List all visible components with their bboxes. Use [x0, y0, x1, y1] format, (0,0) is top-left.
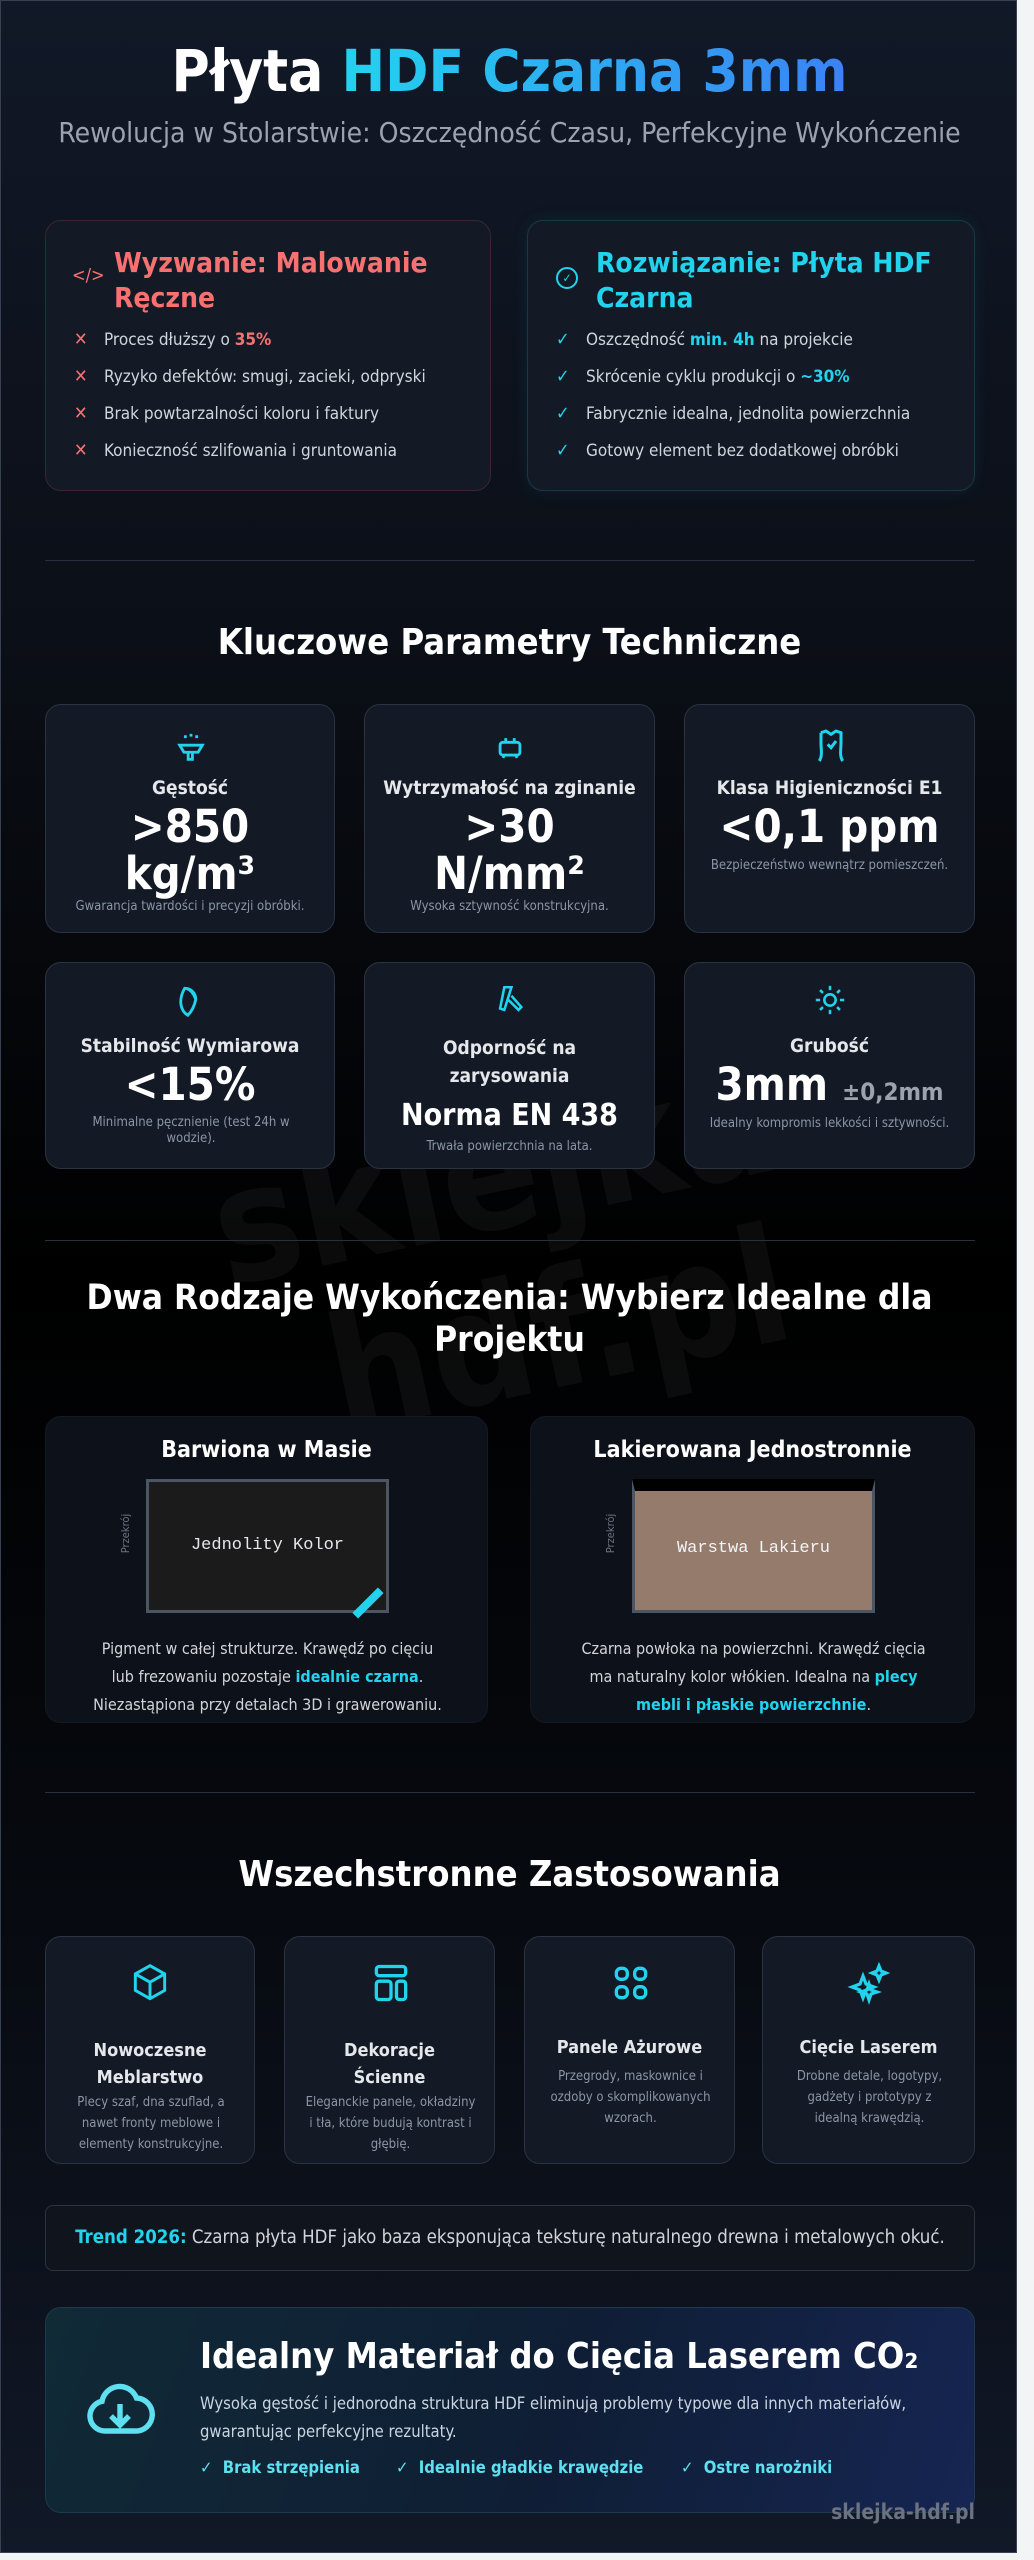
panel: dyed	[45, 1416, 488, 1723]
panel: solution: Skrócenie cyklu produkcji o ~30%	[586, 367, 850, 387]
panel: challenge: Proces dłuższy o 35%	[104, 330, 271, 350]
card: stability: Minimalne pęcznienie (test 24h w wodzie).	[92, 1115, 290, 1146]
card: openwork panels: Panele Ażurowe	[557, 2037, 702, 2058]
card: bending: Wytrzymałość na zginanie	[383, 777, 636, 799]
panel: solution: ✓	[556, 329, 570, 350]
card: laser cutting	[762, 1936, 975, 2164]
icon: pen	[352, 1587, 384, 1619]
card: bending	[364, 704, 655, 933]
watermark: sklejka-	[196, 1009, 851, 1323]
panel: challenge: Ryzyko defektów: smugi, zacieki, odpryski	[104, 367, 426, 387]
card: hygiene: Klasa Higieniczności E1	[717, 777, 942, 799]
panel: laser material: Wysoka gęstość i jednorodna struktura HDF eliminują problemy typowe dla innych materiałów, gwarantując perfekcyjne rezultaty.	[200, 2394, 906, 2441]
panel: dyed: Przekrój	[119, 1514, 132, 1553]
card: hygiene	[684, 704, 975, 933]
card: stability	[45, 962, 335, 1169]
diagram: solid color: Jednolity Kolor	[191, 1536, 344, 1555]
diagram: lacquer layer	[632, 1479, 875, 1613]
icon: leaf	[179, 986, 198, 1017]
card: furniture: Plecy szaf, dna szuflad, a nawet fronty meblowe i elementy konstrukcyjne.	[77, 2095, 225, 2152]
panel: lacquered: Czarna powłoka na powierzchni. Krawędź cięcia ma naturalny kolor włókien. Idealna na plecy mebli i płaskie powierzchnie.	[581, 1639, 926, 1714]
card: scratch: Trwała powierzchnia na lata.	[426, 1139, 593, 1154]
card: furniture: Meblarstwo	[97, 2067, 203, 2088]
card: laser cutting: Drobne detale, logotypy, gadżety i prototypy z idealną krawędzią.	[797, 2069, 942, 2126]
watermark	[196, 1009, 851, 1471]
card: bending: Wysoka sztywność konstrukcyjna.	[410, 899, 609, 914]
icon: bending	[498, 738, 522, 758]
panel: laser material: ✓ Brak strzępienia	[200, 2458, 360, 2477]
panel: dyed: Barwiona w Masie	[161, 1437, 372, 1463]
panel: lacquered: Przekrój	[604, 1514, 617, 1553]
heading: finishes: Dwa Rodzaje Wykończenia: Wybierz Idealne dla Projektu	[87, 1278, 932, 1360]
card: bending: N/mm²	[434, 847, 585, 900]
card: hygiene: Bezpieczeństwo wewnątrz pomieszczeń.	[711, 858, 948, 873]
panel: challenge: ✕	[74, 440, 88, 461]
panel: laser material: ✓ Ostre narożniki	[681, 2458, 832, 2477]
card: density: >850	[131, 800, 249, 853]
card: density: Gwarancja twardości i precyzji obróbki.	[76, 899, 304, 914]
card: wall decor: Dekoracje	[344, 2040, 435, 2061]
title: Płyta HDF Czarna 3mm	[172, 37, 847, 105]
panel: lacquered: Lakierowana Jednostronnie	[593, 1437, 912, 1463]
panel: solution	[527, 220, 975, 491]
card: thickness: 3mm ±0,2mm	[716, 1058, 943, 1111]
heading: challenge: Ręczne	[114, 281, 215, 314]
card: furniture	[45, 1936, 255, 2164]
card: laser cutting: Cięcie Laserem	[800, 2037, 937, 2058]
card: hygiene: <0,1 ppm	[720, 800, 939, 853]
panel: lacquered	[530, 1416, 975, 1723]
card: scratch	[364, 962, 655, 1169]
card: thickness: Idealny kompromis lekkości i sztywności.	[710, 1116, 949, 1131]
panel: laser material: Idealny Materiał do Cięcia Laserem CO₂	[200, 2336, 918, 2377]
card: thickness	[684, 962, 975, 1169]
card: furniture: Nowoczesne	[94, 2040, 206, 2061]
card: thickness: Grubość	[790, 1035, 869, 1057]
panel: challenge	[45, 220, 491, 491]
panel: solution: ✓	[556, 366, 570, 387]
heading: applications: Wszechstronne Zastosowania	[238, 1854, 781, 1895]
icon: tool	[498, 986, 523, 1012]
panel: laser material: ✓ Idealnie gładkie krawędzie	[396, 2458, 643, 2477]
icon: density	[177, 734, 205, 761]
panel: laser material	[45, 2307, 975, 2513]
card: density: Gęstość	[152, 777, 228, 799]
card: wall decor: Eleganckie panele, okładziny i tła, które budują kontrast i głębię.	[306, 2095, 475, 2152]
heading: solution: Czarna	[596, 281, 694, 314]
panel: solution: ✓	[556, 403, 570, 424]
heading: challenge: Wyzwanie: Malowanie	[114, 246, 428, 279]
panel: solution: Oszczędność min. 4h na projekcie	[586, 330, 853, 350]
card: density: kg/m³	[125, 847, 255, 900]
card: wall decor: Ścienne	[354, 2067, 425, 2088]
icon: code: </>	[72, 265, 105, 286]
heading: parameters: Kluczowe Parametry Techniczne	[218, 622, 801, 663]
panel: challenge: ✕	[74, 329, 88, 350]
icon: sun	[816, 986, 844, 1014]
card: wall decor	[284, 1936, 495, 2164]
trend bar: Trend 2026: Czarna płyta HDF jako baza eksponująca teksturę naturalnego drewna i metalowych okuć.	[75, 2227, 945, 2248]
panel: challenge: Konieczność szlifowania i gruntowania	[104, 441, 397, 461]
subtitle: Rewolucja w Stolarstwie: Oszczędność Czasu, Perfekcyjne Wykończenie	[58, 116, 961, 149]
card: stability: Stabilność Wymiarowa	[81, 1035, 299, 1057]
panel: challenge: ✕	[74, 403, 88, 424]
trend bar	[45, 2205, 975, 2271]
card: stability: <15%	[125, 1058, 255, 1111]
card: scratch: Norma EN 438	[401, 1098, 618, 1133]
panel: dyed: Pigment w całej strukturze. Krawędź po cięciu lub frezowaniu pozostaje idealnie czarna. Niezastąpiona przy detalach 3D i grawerowaniu.	[93, 1639, 442, 1714]
heading: challenge	[114, 246, 428, 314]
watermark: hdf.pl	[311, 1191, 806, 1471]
panel: solution: ✓	[556, 440, 570, 461]
card: openwork panels	[524, 1936, 735, 2164]
card: scratch: zarysowania	[450, 1065, 569, 1087]
card: density	[45, 704, 335, 933]
diagram: solid color	[146, 1479, 389, 1613]
icon: check circle: ✓	[562, 271, 572, 285]
panel: challenge: ✕	[74, 366, 88, 387]
footer brand: sklejka-hdf.pl	[831, 2500, 975, 2524]
icon: check circle	[556, 267, 578, 289]
icon: shield	[818, 729, 844, 762]
panel: challenge: Brak powtarzalności koloru i faktury	[104, 404, 379, 424]
card: bending: >30	[464, 800, 555, 853]
panel: solution: Fabrycznie idealna, jednolita powierzchnia	[586, 404, 910, 424]
icon: cloud download	[87, 2384, 155, 2434]
heading: solution: Rozwiązanie: Płyta HDF	[596, 246, 932, 279]
card: openwork panels: Przegrody, maskownice i ozdoby o skomplikowanych wzorach.	[550, 2069, 711, 2126]
heading: solution	[596, 246, 932, 314]
card: scratch: Odporność na	[443, 1037, 576, 1059]
diagram: lacquer layer: Warstwa Lakieru	[677, 1539, 830, 1558]
panel: solution: Gotowy element bez dodatkowej obróbki	[586, 441, 899, 461]
